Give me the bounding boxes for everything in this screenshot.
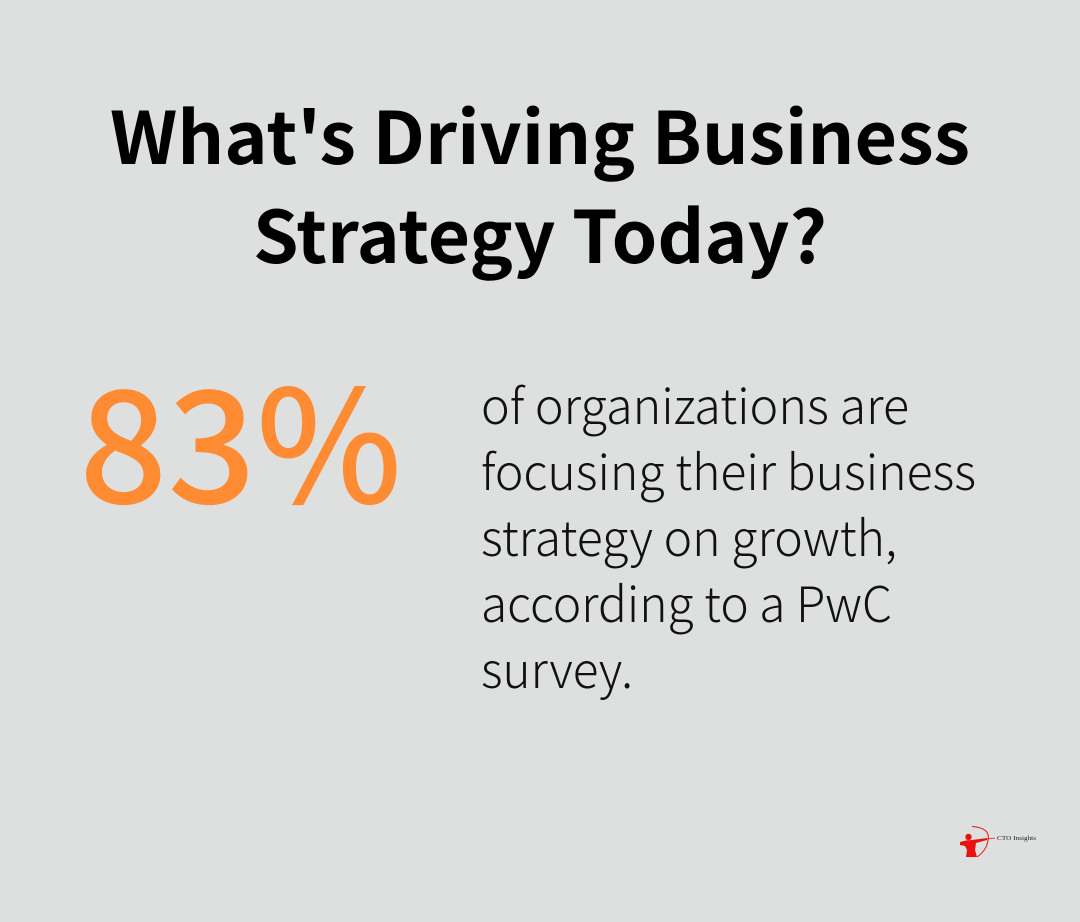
title: Strategy Today? — [253, 179, 827, 284]
logo text: CTO Insights — [997, 835, 1037, 842]
statistic description — [481, 368, 976, 703]
icon: red archer — [960, 826, 995, 857]
statistic description: survey. — [481, 632, 633, 703]
big statistic: 83%: 83% — [79, 322, 402, 548]
statistic description: focusing their business — [481, 434, 976, 505]
statistic description: of organizations are — [481, 368, 909, 439]
statistic description: according to a PwC — [481, 566, 892, 637]
statistic description: strategy on growth, — [481, 500, 897, 571]
logo: CTO Insights archer — [960, 826, 1037, 857]
title: What's Driving Business — [110, 80, 970, 185]
title — [110, 80, 970, 284]
